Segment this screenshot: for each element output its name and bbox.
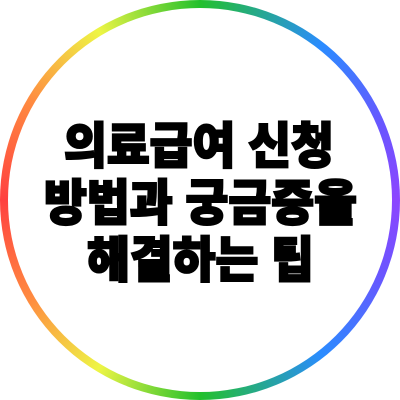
title line 1: 의료급여 신청	[64, 120, 334, 174]
title line 2: 방법과 궁금증을	[44, 177, 357, 231]
title line 3: 해결하는 팁	[87, 234, 314, 288]
